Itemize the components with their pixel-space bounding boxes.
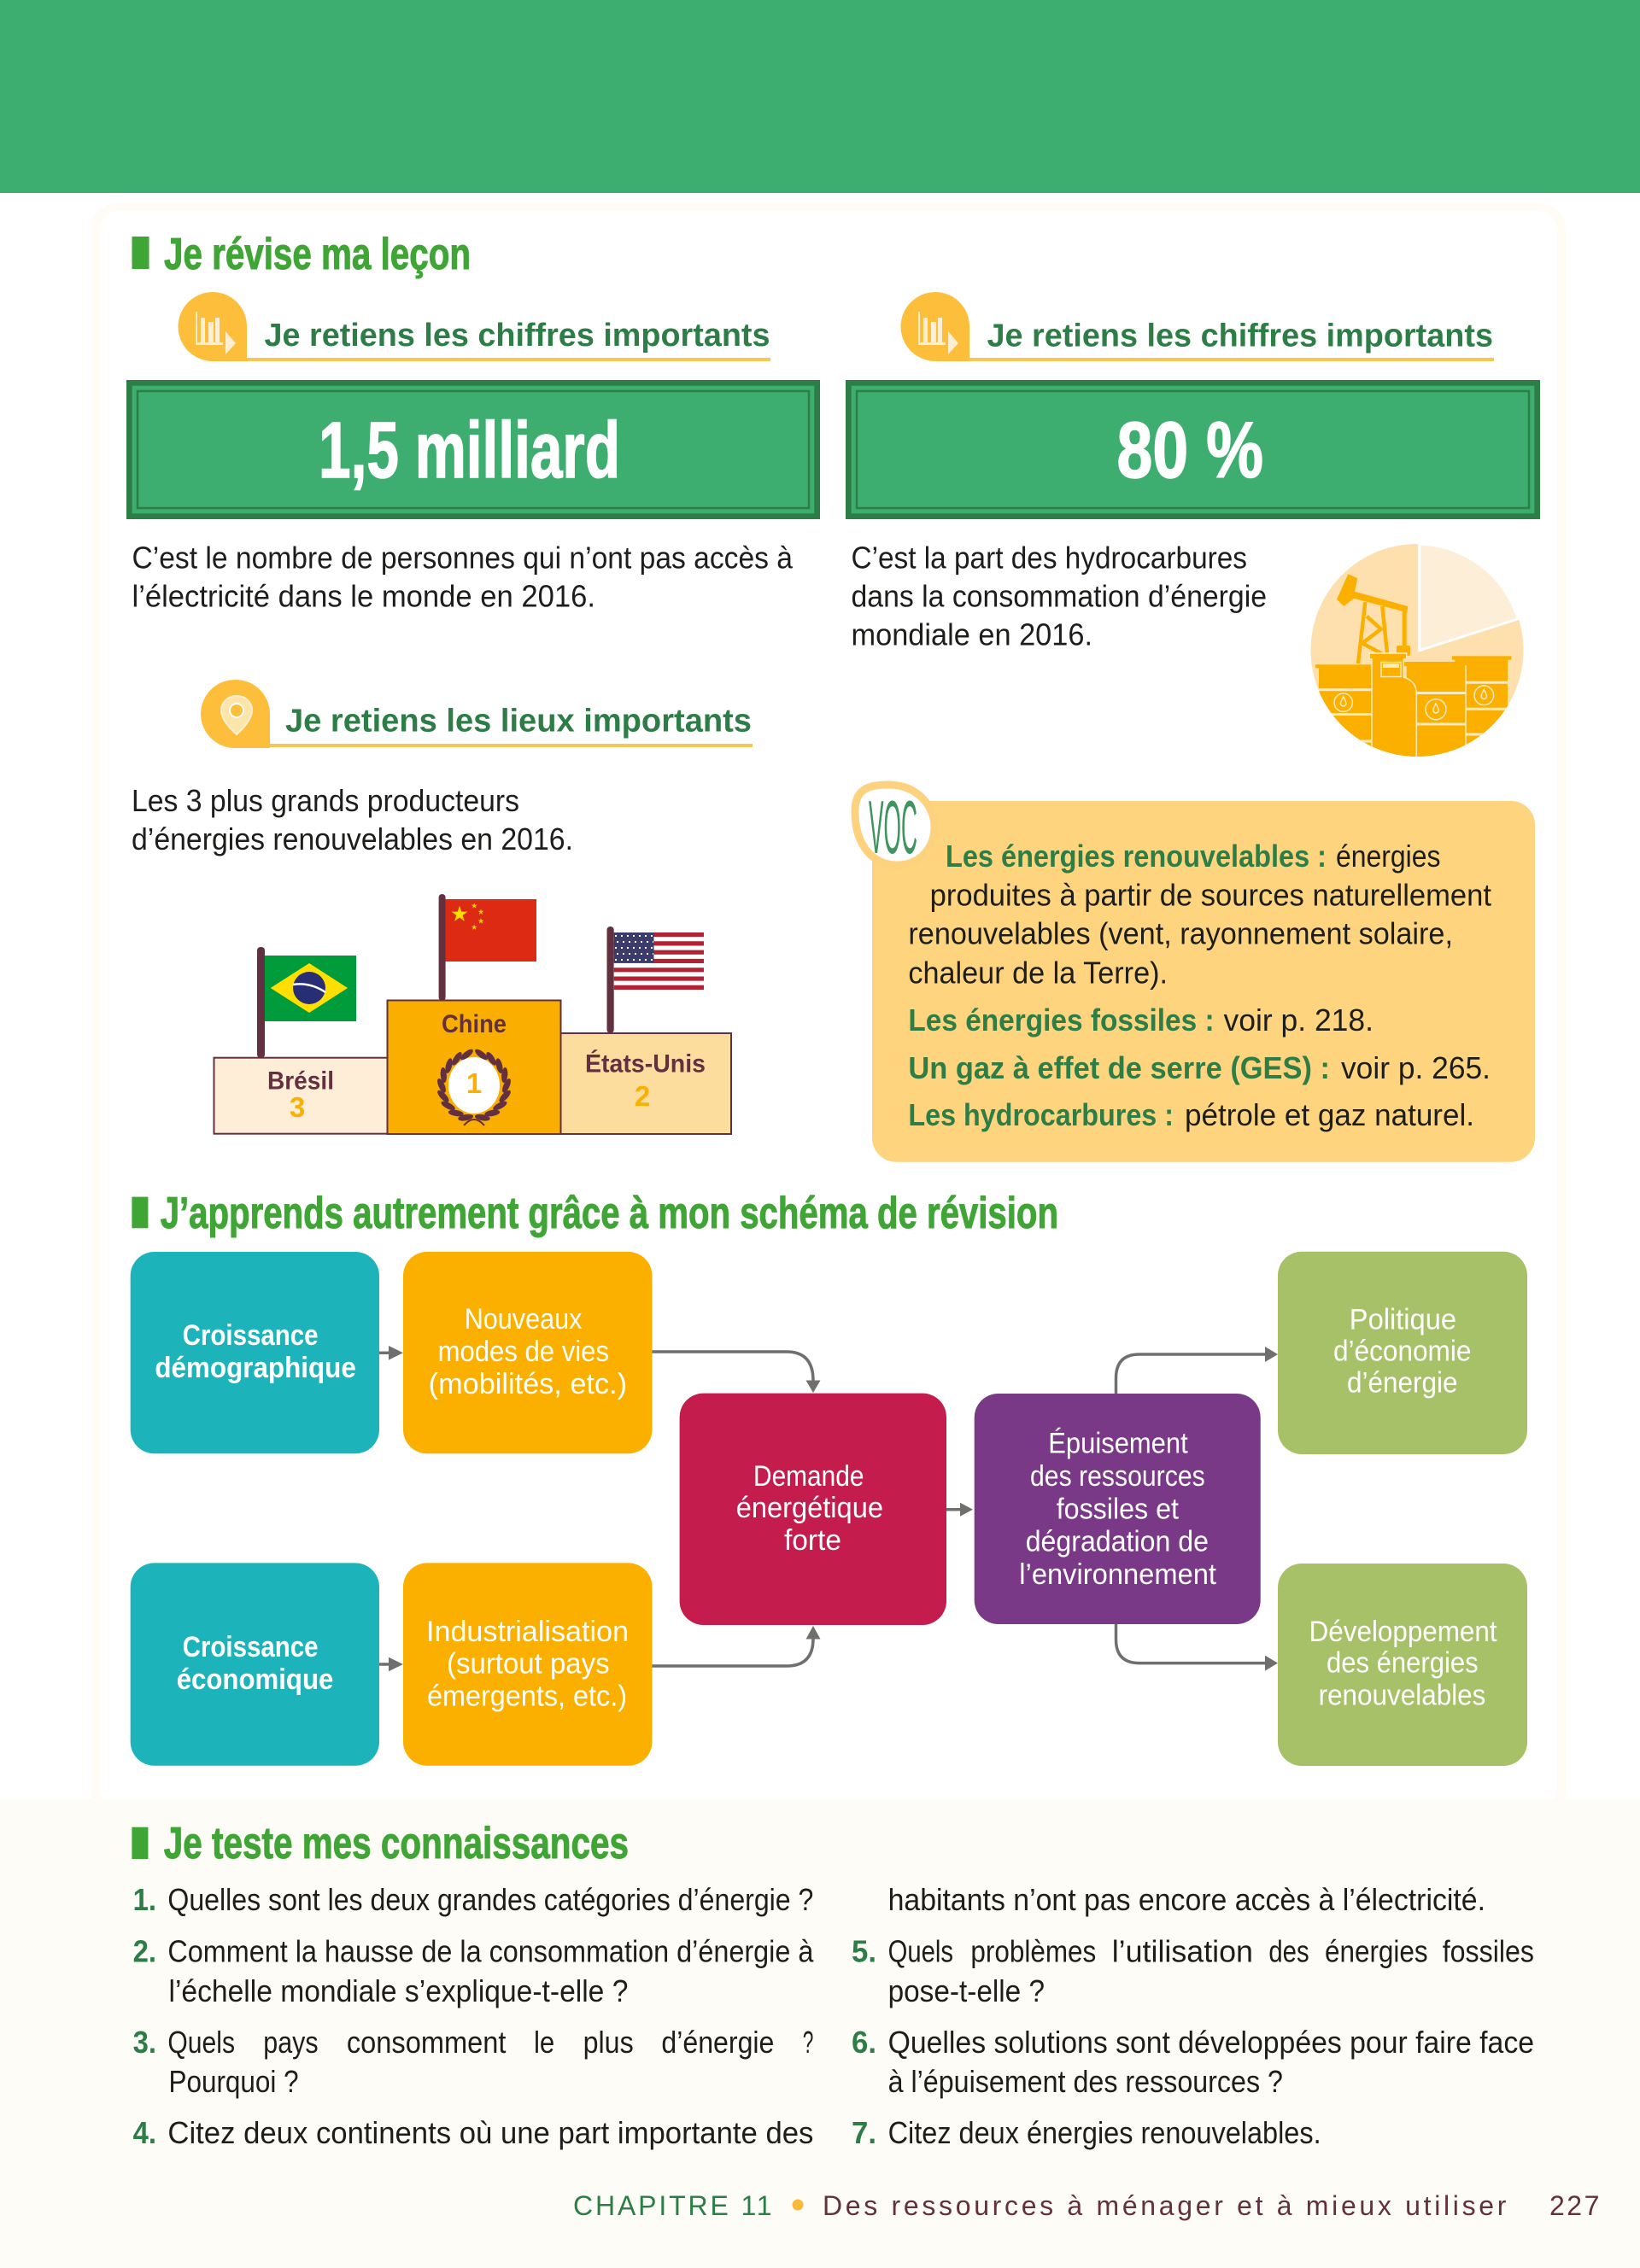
- question 5: l’utilisation: [1112, 1933, 1253, 1969]
- subheading: chiffres: Je retiens les chiffres importants: [265, 318, 770, 354]
- text: définition chiffre 1: [132, 540, 794, 613]
- question 2: Comment la hausse de la consommation d’énergie à: [167, 1933, 814, 1969]
- heading: schéma de révision: J’apprends autrement grâce à mon schéma de révision: [161, 1189, 1058, 1238]
- icon: location pin badge: [201, 680, 270, 748]
- question 7: 7.: [852, 2115, 876, 2150]
- text: définitions: Un gaz à effet de serre (GES) :: [908, 1050, 1330, 1085]
- question 2: 2.: [133, 1933, 156, 1969]
- box: épuisement des ressources: fossiles et: [1057, 1493, 1180, 1525]
- text: producteurs: Les 3 plus grands producteurs: [132, 783, 519, 818]
- box: politique d'économie d'énergie: Politique: [1350, 1304, 1456, 1336]
- flag: Brésil: [257, 947, 356, 1058]
- question 5: [852, 1933, 1534, 2008]
- question 4 start: Citez deux continents où une part importante des: [167, 2115, 813, 2150]
- text: définition chiffre 2: [851, 540, 1267, 652]
- barrel: right: [1452, 656, 1512, 750]
- footer: chapter and page number: 227: [1549, 2190, 1599, 2221]
- arrow: économique to industrialisation: [379, 1657, 403, 1671]
- box: industrialisation: (surtout pays: [447, 1647, 610, 1680]
- heading: Je révise ma leçon: Je révise ma leçon: [164, 230, 471, 279]
- box: industrialisation: émergents, etc.): [427, 1681, 627, 1713]
- text: définitions: pétrole et gaz naturel.: [1185, 1097, 1474, 1132]
- subheading: lieux: Je retiens les lieux importants: [285, 704, 752, 739]
- icon: laurel wreath: [436, 1048, 512, 1125]
- box: développement des énergies renouvelables: des énergies: [1327, 1646, 1479, 1679]
- top green band: [0, 0, 1640, 193]
- text: définitions: Les énergies renouvelables :: [946, 839, 1327, 874]
- podium: États-Unis: [560, 1033, 731, 1134]
- question 5: 5.: [852, 1933, 876, 1969]
- panel: vocabulaire: [855, 785, 1535, 1162]
- text: producteurs: d’énergies renouvelables en 2016.: [132, 821, 573, 856]
- icon: bar chart badge: [178, 292, 247, 361]
- icon: VOC bubble: [855, 785, 934, 869]
- panel: test background: [0, 1798, 1640, 2268]
- chart: podium with flags: [214, 894, 731, 1134]
- podium: Brésil: [214, 1058, 388, 1134]
- text: définition chiffre 1: l’électricité dans le monde en 2016.: [132, 579, 595, 613]
- box: développement des énergies renouvelables: Développement: [1309, 1616, 1497, 1648]
- icon: oil pump: [1337, 574, 1410, 663]
- podium: Brésil: Brésil: [267, 1067, 334, 1096]
- box: demande énergétique forte: forte: [784, 1524, 841, 1557]
- panel: lieux importants: [132, 680, 753, 1134]
- box: croissance démographique: [131, 1252, 379, 1453]
- box: politique d'économie d'énergie: [1278, 1252, 1527, 1454]
- box: nouveaux modes de vies: modes de vies: [438, 1336, 609, 1368]
- panel: chiffre 80 %: [846, 292, 1540, 762]
- box: nouveaux modes de vies: Nouveaux: [465, 1303, 582, 1336]
- podium: Chine: Chine: [442, 1010, 507, 1038]
- arrow: démographique to modes de vies: [379, 1346, 403, 1360]
- question 4 end: habitants n’ont pas encore accès à l’électricité.: [888, 1882, 1485, 1917]
- box: épuisement des ressources: dégradation de: [1026, 1526, 1209, 1558]
- question 6: à l’épuisement des ressources ?: [888, 2064, 1283, 2099]
- arrow: industrialisation to demande: [653, 1626, 820, 1666]
- subheading: chiffres 2: Je retiens les chiffres importants: [987, 318, 1493, 354]
- text: producteurs: [132, 783, 573, 856]
- box: nouveaux modes de vies: (mobilités, etc.): [429, 1368, 627, 1400]
- box: industrialisation: [403, 1563, 653, 1766]
- text: définition chiffre 2: dans la consommation d’énergie: [851, 579, 1267, 613]
- question 3: ?: [803, 2025, 813, 2060]
- box: développement des énergies renouvelables: renouvelables: [1319, 1679, 1485, 1711]
- question 3: plus: [583, 2025, 634, 2060]
- question 3: Quels: [167, 2025, 235, 2060]
- icon: oil barrels: [1315, 653, 1511, 762]
- bottle: [1369, 653, 1416, 757]
- podium: Chine: [388, 1001, 560, 1134]
- question 6: 6.: [852, 2025, 876, 2060]
- chart: pie with oil pump and barrels: [1310, 544, 1524, 762]
- box: développement des énergies renouvelables: [1278, 1564, 1527, 1766]
- text: définitions: Les hydrocarbures :: [908, 1097, 1174, 1132]
- box: croissance économique: économique: [177, 1663, 333, 1696]
- figure box: 80 %: 80 %: [1117, 406, 1263, 494]
- box: croissance économique: [131, 1563, 379, 1766]
- text: définition chiffre 1: C’est le nombre de personnes qui n’ont pas accès à: [132, 540, 794, 576]
- questions: right column: [852, 1882, 1534, 2150]
- text: définitions: énergies: [1336, 839, 1440, 874]
- question 5: des: [1268, 1933, 1309, 1969]
- panel: vocabulaire: VOC: [869, 785, 917, 869]
- text: définitions: voir p. 265.: [1341, 1050, 1491, 1085]
- question 5: énergies: [1325, 1933, 1428, 1969]
- text: définition chiffre 2: mondiale en 2016.: [851, 617, 1092, 652]
- box: demande énergétique forte: énergétique: [736, 1492, 883, 1524]
- box: épuisement des ressources: Épuisement: [1048, 1428, 1188, 1460]
- text: définitions: voir p. 218.: [1223, 1002, 1374, 1038]
- footer: chapter and page number: Des ressources à ménager et à mieux utiliser: [823, 2190, 1507, 2221]
- text: définitions: produites à partir de sources naturellement: [930, 878, 1491, 913]
- text: définition chiffre 2: C’est la part des hydrocarbures: [851, 540, 1247, 576]
- question 5: problèmes: [970, 1933, 1096, 1969]
- box: croissance démographique: Croissance: [183, 1319, 319, 1352]
- flag: États-Unis: [606, 926, 704, 1033]
- icon: laurel wreath: 1: [466, 1067, 482, 1099]
- box: croissance démographique: démographique: [155, 1352, 356, 1384]
- text: définitions: chaleur de la Terre).: [908, 956, 1168, 991]
- panel: revision card background: [91, 203, 1566, 1817]
- question 4 start: 4.: [133, 2115, 156, 2150]
- barrel: left: [1315, 664, 1372, 746]
- arrow: épuisement to développement: [1116, 1624, 1278, 1671]
- podium: États-Unis: 2: [635, 1080, 650, 1112]
- podium: Brésil: 3: [290, 1091, 305, 1123]
- question 5: Quels: [888, 1933, 953, 1969]
- question 5: fossiles: [1443, 1933, 1534, 1969]
- icon: drop labels: [1334, 686, 1494, 720]
- figure box: 80 %: [846, 380, 1540, 519]
- icon: bar chart badge 2: [900, 292, 969, 361]
- box: politique d'économie d'énergie: d’économie: [1333, 1336, 1471, 1368]
- text: définitions: [908, 839, 1491, 1132]
- question 7: Citez deux énergies renouvelables.: [888, 2115, 1321, 2150]
- barrel: middle: [1404, 662, 1469, 761]
- arrow: demande to épuisement: [946, 1503, 973, 1517]
- question 6: [852, 2025, 1534, 2099]
- box: nouveaux modes de vies: [403, 1252, 653, 1453]
- box: industrialisation: Industrialisation: [426, 1616, 629, 1648]
- question 3: consomment: [347, 2025, 506, 2060]
- question 3: Pourquoi ?: [169, 2064, 299, 2099]
- box: demande énergétique forte: [680, 1394, 946, 1625]
- footer: chapter and page number: [573, 2190, 1599, 2221]
- question 3: le: [534, 2025, 554, 2060]
- box: demande énergétique forte: Demande: [753, 1460, 864, 1493]
- question 5: pose-t-elle ?: [888, 1973, 1045, 2008]
- question 2: l’échelle mondiale s’explique-t-elle ?: [169, 1973, 628, 2008]
- podium: États-Unis: États-Unis: [585, 1049, 706, 1078]
- question 6: Quelles solutions sont développées pour faire face: [888, 2025, 1534, 2060]
- text: définitions: Les énergies fossiles :: [908, 1002, 1215, 1038]
- box: croissance économique: Croissance: [183, 1631, 319, 1663]
- box: épuisement des ressources: [975, 1394, 1261, 1624]
- footer: chapter and page number: CHAPITRE 11: [573, 2190, 772, 2221]
- box: épuisement des ressources: l’environnement: [1019, 1558, 1217, 1591]
- questions: left column: [133, 1882, 814, 2150]
- question 3: pays: [263, 2025, 319, 2060]
- box: politique d'économie d'énergie: d’énergie: [1347, 1367, 1457, 1400]
- figure box: 1,5 milliard: 1,5 milliard: [319, 406, 620, 494]
- question 3: [133, 2025, 813, 2099]
- arrow: épuisement to politique: [1116, 1347, 1278, 1394]
- question 3: d’énergie: [661, 2025, 774, 2060]
- figure box: 1,5 milliard: [126, 380, 820, 519]
- box: épuisement des ressources: des ressources: [1030, 1460, 1205, 1493]
- question 3: 3.: [133, 2025, 156, 2060]
- diagram: revision flowchart: [131, 1252, 1527, 1766]
- question 2: [133, 1933, 814, 2008]
- arrow: modes de vies to demande: [653, 1352, 820, 1393]
- panel: chiffre 1,5 milliard: [126, 292, 820, 613]
- question 1: Quelles sont les deux grandes catégories d’énergie ?: [167, 1882, 813, 1917]
- text: définitions: renouvelables (vent, rayonnement solaire,: [908, 916, 1453, 951]
- heading: Je teste mes connaissances: Je teste mes connaissances: [164, 1819, 629, 1868]
- flag: Chine: [439, 894, 536, 1001]
- question 1: 1.: [133, 1882, 156, 1917]
